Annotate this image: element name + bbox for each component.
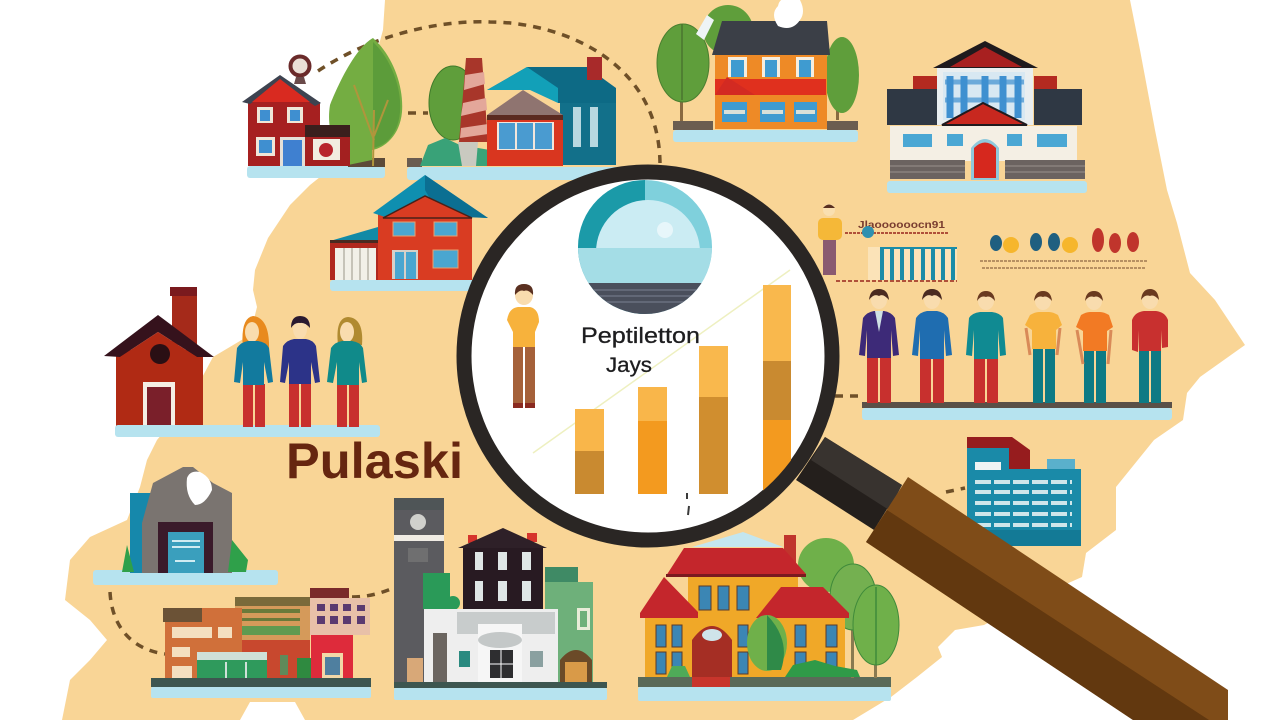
wooden handle — [866, 477, 1228, 720]
person: orange shirt — [1076, 291, 1113, 403]
building: clock tower and town hall — [394, 498, 607, 700]
person: purple jacket — [859, 289, 899, 403]
building: orange house with trees — [657, 0, 859, 142]
person: yellow shirt — [1025, 291, 1062, 403]
building: rock-side station — [93, 467, 278, 585]
bar chart — [575, 285, 791, 500]
person: navy top — [280, 316, 320, 427]
figure in lens — [507, 284, 539, 408]
lens subtext: Jays — [606, 354, 652, 377]
left platform with three people — [115, 316, 380, 437]
building: red house with pin and tree — [242, 38, 402, 178]
people row on right — [859, 289, 1172, 420]
person: olive hair — [327, 317, 367, 427]
infographic: small figure with bar chart — [818, 204, 957, 281]
building: row of shops — [151, 588, 371, 698]
building: brick chimney and teal house — [407, 57, 632, 180]
dashed route lines — [110, 22, 965, 654]
donut globe icon — [578, 180, 713, 320]
person: blue jacket — [912, 289, 952, 403]
person: orange hair — [234, 316, 273, 427]
building: red house with teal roof — [330, 175, 488, 291]
building: red barn with chimney — [104, 287, 214, 427]
person: teal top — [966, 291, 1006, 403]
heading: Pulaski: Pulaski — [286, 433, 463, 489]
building: blue office tower — [967, 437, 1081, 546]
lens text: Peptiletton — [581, 323, 700, 348]
handle neck — [796, 437, 902, 530]
person: red shirt — [1132, 289, 1168, 403]
small ticks — [687, 493, 689, 515]
building: yellow manor with red roofs — [638, 532, 899, 701]
infographic: ornament icons with lines — [980, 228, 1147, 268]
lens — [464, 172, 832, 540]
lens contents — [507, 180, 791, 515]
magnifying glass — [464, 172, 1228, 720]
building: civic hall with red gables — [887, 41, 1087, 193]
trend line — [533, 270, 790, 453]
infographic: small figure with bar chart: Jlaoooooocn91 — [858, 220, 946, 231]
